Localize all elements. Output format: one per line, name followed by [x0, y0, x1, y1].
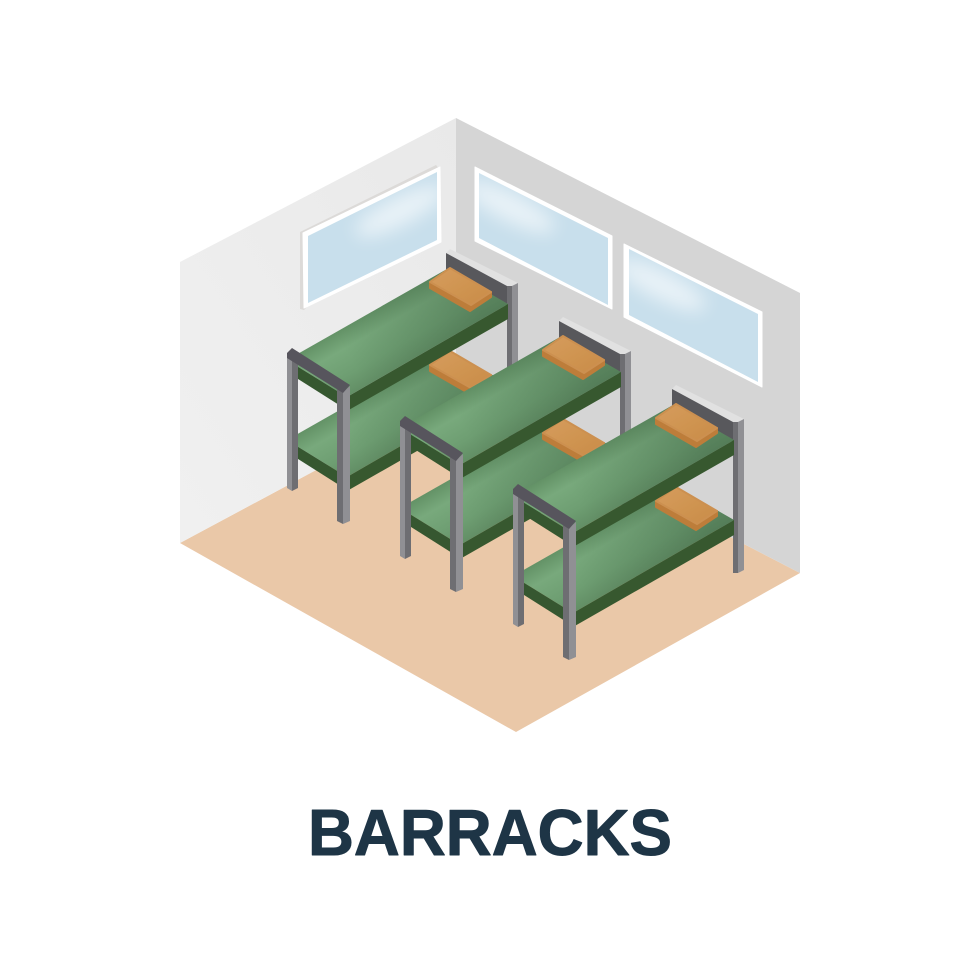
front frame [287, 348, 350, 524]
bunk bed 2 [400, 317, 631, 592]
upper pillow [430, 268, 491, 311]
bunk bed 3 [513, 385, 744, 660]
left wall [180, 118, 456, 543]
front frame [513, 484, 576, 660]
right wall [456, 118, 800, 573]
headboard and back post [672, 385, 744, 573]
lower mattress [400, 417, 621, 559]
lower pillow [656, 487, 717, 530]
window: right wall, second [610, 244, 762, 387]
lower pillow [543, 419, 604, 462]
upper pillow [656, 404, 717, 447]
upper mattress [513, 405, 734, 547]
bunk bed 1 [287, 249, 518, 524]
window: left wall [300, 165, 451, 310]
window: right wall, first [459, 167, 612, 309]
isometric room [180, 118, 800, 732]
headboard and back post [446, 249, 518, 437]
front frame [400, 416, 463, 592]
lower mattress [513, 485, 734, 627]
upper mattress [287, 269, 508, 411]
upper pillow [543, 336, 604, 379]
lower pillow [430, 351, 491, 394]
upper mattress [400, 337, 621, 479]
title: BARRACKS [308, 796, 672, 869]
lower mattress [287, 349, 508, 491]
floor [180, 395, 800, 732]
headboard and back post [559, 317, 631, 505]
